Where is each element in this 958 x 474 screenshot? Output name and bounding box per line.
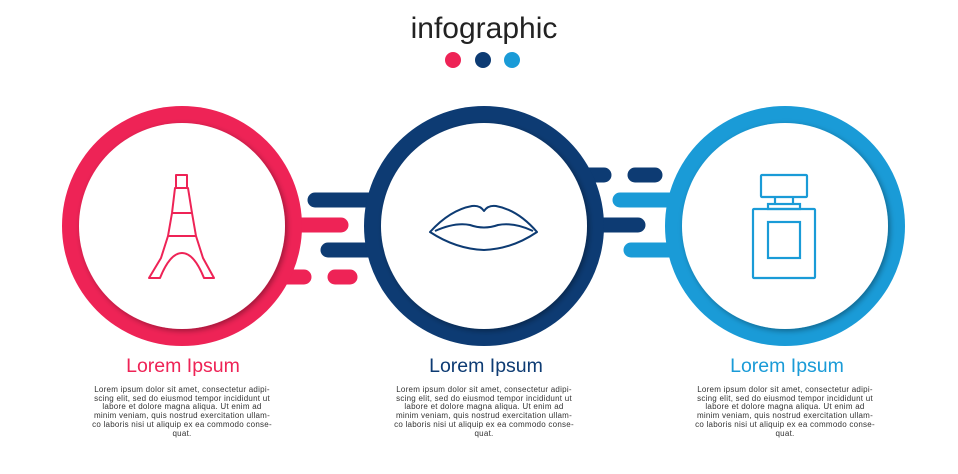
text 1: quat.	[172, 429, 192, 438]
text 3	[695, 385, 875, 438]
text 1: Lorem ipsum dolor sit amet, consectetur adipi-	[94, 385, 270, 394]
connectors	[270, 175, 700, 277]
text 2: scing elit, sed do eiusmod tempor incididunt ut	[396, 394, 572, 403]
text 1: minim veniam, quis nostrud exercitation ullam-	[94, 411, 270, 420]
text 3: labore et dolore magna aliqua. Ut enim ad	[705, 402, 865, 411]
legend dots	[445, 52, 520, 68]
icon: perfume bottle	[753, 175, 815, 278]
heading 3: Lorem Ipsum	[730, 355, 844, 377]
text 2: labore et dolore magna aliqua. Ut enim ad	[404, 402, 564, 411]
text 1	[92, 385, 272, 438]
text 1: labore et dolore magna aliqua. Ut enim ad	[102, 402, 262, 411]
circle 3	[665, 106, 905, 346]
heading 1: Lorem Ipsum	[126, 355, 240, 377]
text 1: scing elit, sed do eiusmod tempor incididunt ut	[94, 394, 270, 403]
text 3: scing elit, sed do eiusmod tempor incididunt ut	[697, 394, 873, 403]
text 3: minim veniam, quis nostrud exercitation ullam-	[697, 411, 873, 420]
text 2: Lorem ipsum dolor sit amet, consectetur adipi-	[396, 385, 572, 394]
icon: eiffel tower	[149, 175, 214, 278]
circle 1	[62, 106, 302, 346]
heading 2: Lorem Ipsum	[429, 355, 543, 377]
icon: lips	[430, 206, 537, 250]
text 3: co laboris nisi ut aliquip ex ea commodo conse-	[695, 420, 875, 429]
circle 2	[364, 106, 604, 346]
title: infographic	[411, 12, 557, 45]
text 2: quat.	[474, 429, 494, 438]
text 2: co laboris nisi ut aliquip ex ea commodo conse-	[394, 420, 574, 429]
text 2: minim veniam, quis nostrud exercitation ullam-	[396, 411, 572, 420]
text 2	[394, 385, 574, 438]
text 1: co laboris nisi ut aliquip ex ea commodo conse-	[92, 420, 272, 429]
text 3: Lorem ipsum dolor sit amet, consectetur adipi-	[697, 385, 873, 394]
text 3: quat.	[775, 429, 795, 438]
